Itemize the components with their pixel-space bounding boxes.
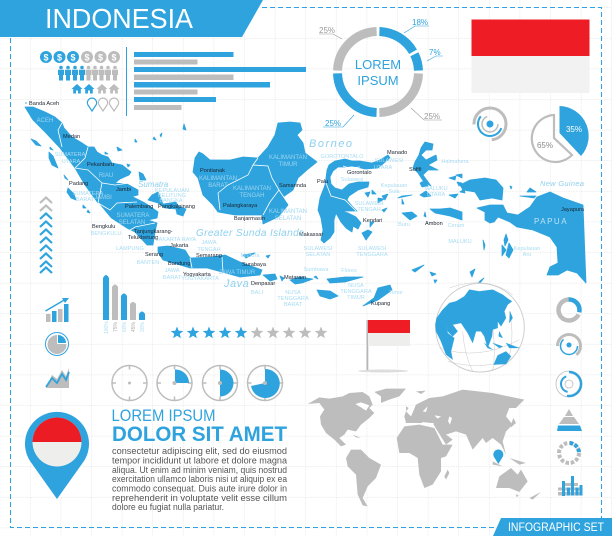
- map labels: provinces: Sumbawa: [304, 267, 329, 273]
- map labels: provinces: JAMBI: [94, 195, 112, 201]
- region: Papua: [457, 178, 586, 283]
- map pin with flag: [25, 412, 89, 499]
- map labels: cities: Surabaya: [242, 262, 267, 268]
- map labels: cities: Padang: [69, 181, 88, 187]
- map labels: provinces: KALIMANTAN: [199, 176, 237, 182]
- map labels: provinces: KALIMANTAN: [269, 155, 307, 161]
- map labels: provinces: MALUKU: [448, 239, 472, 245]
- icon: dollar coins: $: [43, 52, 49, 62]
- map labels: provinces: BENGKULU: [91, 231, 121, 237]
- map labels: provinces: Kepulauan: [514, 246, 540, 252]
- map labels: provinces: BANTEN: [137, 260, 159, 266]
- map labels: cities: Gorontalo: [347, 170, 372, 176]
- map labels: cities: Manado: [387, 150, 407, 156]
- icon: segmented ring: [555, 296, 583, 324]
- icon: growth chart: [46, 298, 69, 322]
- map labels: cities: Jambi: [116, 187, 131, 193]
- donut callouts: 7%: [429, 48, 441, 57]
- map labels: cities: Palu: [317, 179, 328, 185]
- donut callouts: 25%: [325, 119, 341, 128]
- map labels: provinces: SULAWESI: [375, 158, 404, 164]
- donut callouts: 18%: [412, 18, 428, 27]
- body paragraph: aliqua. Ut enim ad minim veniam, quis nostrud: [112, 465, 287, 475]
- clock gauges: [112, 366, 282, 400]
- map labels: provinces: LAMPUNG: [116, 246, 144, 252]
- map labels: cities: Palangkaraya: [223, 203, 258, 209]
- vertical bar chart: 60%: [122, 321, 128, 332]
- map labels: provinces: Flores: [341, 268, 357, 274]
- body paragraph: commodo consequat. Duis aute irure dolor in: [112, 484, 287, 494]
- map labels: provinces: Sula: [388, 189, 400, 195]
- map labels: provinces: BARAT: [163, 275, 182, 281]
- map labels: provinces: SUMATERA: [55, 152, 86, 158]
- map labels: provinces: Sumatra: [138, 180, 169, 189]
- horizontal bar chart: [126, 47, 306, 116]
- map labels: provinces: KEPULAUAN: [155, 188, 189, 194]
- donut chart: lorem ipsum: LOREM: [355, 57, 401, 72]
- map labels: provinces: GOROTONTALO: [320, 154, 364, 160]
- icon: houses row: [72, 84, 120, 94]
- body paragraph: consectetur adipiscing elit, sed do eiusmod: [112, 446, 287, 456]
- map labels: provinces: Madura: [241, 253, 260, 259]
- map labels: provinces: Kepulauan: [381, 183, 407, 189]
- icon: dollar coins: $: [98, 52, 103, 62]
- map labels: cities: Jakarta: [170, 243, 189, 249]
- map labels: cities: Medan: [63, 134, 80, 140]
- map labels: cities: Denpasar: [251, 281, 275, 287]
- map labels: provinces: SELATAN: [119, 220, 145, 226]
- world map: [308, 389, 541, 506]
- map labels: provinces: Greater Sunda Islands: [196, 228, 304, 239]
- map labels: cities: Pekanbaru: [87, 162, 114, 168]
- heading: dolor sit amet: DOLOR SIT AMET: [112, 423, 287, 446]
- map labels: provinces: Sulawesi: [341, 177, 363, 183]
- icon: dotted ring: [555, 439, 583, 467]
- map labels: provinces: RIAU: [99, 173, 113, 179]
- title banner: [0, 0, 263, 37]
- flag: Indonesia large: [472, 20, 590, 93]
- map labels: provinces: New Guinea: [540, 179, 584, 188]
- map labels: provinces: TENGGARA: [356, 252, 388, 258]
- icon: area chart: [46, 368, 69, 388]
- heading: lorem ipsum: LOREM IPSUM: [112, 406, 216, 425]
- icon stats: dollars, people, houses, pins: [40, 51, 120, 111]
- map labels: cities: [25, 101, 585, 307]
- region: Maluku: [398, 142, 536, 290]
- donut callouts: [319, 18, 443, 128]
- spiral chart: [474, 108, 506, 140]
- pie chart 35/65: [532, 106, 589, 162]
- map labels: cities: Kupang: [371, 301, 390, 307]
- map labels: cities: Makassar: [299, 232, 323, 238]
- icon: circular arrows: [556, 371, 582, 397]
- map labels: provinces: SULAWESI: [358, 246, 387, 252]
- map labels: provinces: NUSA: [285, 290, 301, 296]
- map labels: cities: Bengkulu: [92, 224, 115, 230]
- map labels: cities: Pontianak: [200, 168, 225, 174]
- icon: dollar coins: $: [57, 52, 62, 62]
- map of Indonesia: [25, 101, 586, 308]
- donut chart: lorem ipsum: [319, 18, 443, 128]
- map labels: provinces: UTARA: [427, 192, 446, 198]
- map labels: cities: Kendari: [363, 218, 382, 224]
- icon: people row: [58, 66, 118, 80]
- map labels: provinces: YOGYAKARTA: [181, 276, 219, 282]
- map labels: provinces: TENGGARA: [340, 289, 372, 295]
- footer banner: [493, 518, 612, 536]
- body paragraph: tempor incididunt ut labore et dolore magna: [112, 456, 287, 466]
- icon: dollar coins: $: [70, 52, 76, 62]
- map labels: cities: Telukbetung: [128, 235, 158, 241]
- map labels: provinces: TIMUR: [347, 295, 365, 301]
- icon: spiral ring: [558, 334, 580, 358]
- map labels: provinces: SUMATERA: [117, 213, 149, 219]
- map labels: provinces: Timor: [389, 290, 403, 296]
- map labels: provinces: BARAT: [76, 197, 95, 203]
- map labels: cities: Bandung: [168, 261, 190, 267]
- map labels: cities: Banda Aceh: [29, 101, 59, 107]
- body paragraph: [112, 446, 287, 512]
- title banner: INDONESIA: [45, 3, 193, 34]
- icon: dollar coins: $: [111, 52, 117, 62]
- body paragraph: reprehenderit in voluptate velit esse cillum: [112, 493, 287, 503]
- icon: pyramid: [557, 409, 582, 431]
- globe: [435, 283, 524, 372]
- vertical bar chart: 75%: [113, 321, 119, 332]
- vertical bar chart: 45%: [131, 321, 137, 332]
- map labels: cities: Jayapura: [561, 207, 585, 213]
- icon: pins row: [87, 98, 119, 111]
- region: Kalimantan: [193, 122, 317, 224]
- map labels: provinces: Borneo: [309, 138, 353, 150]
- map labels: provinces: SULAWESI: [355, 201, 384, 207]
- map labels: provinces: TENGGARA: [277, 296, 309, 302]
- map labels: provinces: [37, 118, 584, 308]
- map labels: provinces: JAWA TIMUR: [219, 270, 256, 276]
- map labels: cities: Serang: [145, 252, 163, 258]
- map labels: provinces: SELATAN: [306, 252, 330, 258]
- map labels: provinces: TENGAH: [239, 193, 265, 199]
- map labels: provinces: PAPUA: [534, 217, 568, 226]
- map labels: provinces: ACEH: [37, 118, 53, 124]
- map labels: provinces: JAWA: [164, 268, 180, 274]
- map labels: provinces: KALIMANTAN: [269, 209, 307, 215]
- icon: dollar coins: [40, 51, 120, 63]
- donut chart: lorem ipsum: IPSUM: [357, 73, 399, 88]
- small flag on pole: [358, 320, 410, 372]
- region: Sumatra: [25, 107, 186, 245]
- footer banner: INFOGRAPHIC SET: [508, 522, 604, 534]
- map labels: provinces: TIMUR: [278, 162, 298, 168]
- body paragraph: dolore eu fugiat nulla pariatur.: [112, 502, 224, 512]
- map labels: provinces: SUMATERA: [73, 191, 104, 197]
- map labels: provinces: Java: [223, 278, 249, 290]
- map labels: cities: Semarang: [196, 253, 222, 259]
- map labels: provinces: JAWA: [201, 240, 217, 246]
- vertical bar chart: [103, 275, 146, 334]
- map labels: provinces: UTARA: [374, 165, 393, 171]
- map labels: provinces: BARAT: [208, 183, 228, 189]
- donut callouts: 25%: [424, 112, 440, 121]
- map labels: cities: Yogyakarta: [183, 272, 212, 278]
- map labels: cities: Pangkalpinang: [158, 204, 195, 210]
- map labels: provinces: TENGAH: [197, 247, 221, 253]
- map labels: provinces: Ceram: [448, 223, 465, 229]
- region: Java and Nusa Tenggara: [158, 246, 392, 306]
- map labels: cities: Sofifi: [409, 167, 421, 173]
- right column icons: [555, 296, 583, 496]
- map labels: provinces: TENGAH: [357, 207, 381, 213]
- icon: equalizer: [558, 476, 582, 496]
- vertical bar chart: 30%: [140, 321, 146, 332]
- map labels: provinces: UTARA: [62, 159, 81, 165]
- star rating: [171, 326, 327, 338]
- pin: Indonesia on world map: [493, 450, 503, 464]
- icon: dollar coins: $: [84, 52, 90, 62]
- map labels: provinces: Buru: [398, 222, 410, 228]
- map labels: provinces: NUSA: [348, 283, 364, 289]
- map labels: provinces: SELATAN: [275, 216, 301, 222]
- map labels: provinces: SULAWESI: [304, 246, 333, 252]
- map labels: provinces: Aru: [523, 252, 531, 258]
- map labels: provinces: JAKARTA RAYA: [156, 237, 196, 243]
- map labels: cities: Palembang: [125, 204, 153, 210]
- map labels: provinces: BARAT: [284, 302, 303, 308]
- map labels: provinces: KALIMANTAN: [233, 186, 271, 192]
- map labels: cities: Mataram: [284, 275, 306, 281]
- pie chart 35/65: 65%: [537, 141, 553, 150]
- map labels: cities: Tanjungkarang-: [134, 229, 173, 235]
- donut callouts: 25%: [319, 26, 335, 35]
- icon: small pie: [46, 332, 68, 356]
- map labels: cities: Ambon: [425, 221, 443, 227]
- body paragraph: exercitation ullamco laboris nisi ut aliquip ex ea: [112, 474, 287, 484]
- chevron arrow stack: [40, 198, 52, 273]
- region: Sulawesi: [318, 155, 390, 243]
- map labels: provinces: MALUKU: [424, 186, 448, 192]
- map labels: provinces: BELITUNG: [158, 193, 186, 199]
- map labels: provinces: Halmahera: [441, 159, 470, 165]
- map labels: provinces: BANGKA: [159, 198, 183, 204]
- vertical bar chart: 100%: [104, 321, 110, 334]
- map labels: cities: Samarinda: [279, 183, 307, 189]
- map labels: provinces: BALI: [251, 290, 264, 296]
- map labels: cities: Banjarmasin: [234, 216, 265, 222]
- pie chart 35/65: 35%: [566, 125, 582, 134]
